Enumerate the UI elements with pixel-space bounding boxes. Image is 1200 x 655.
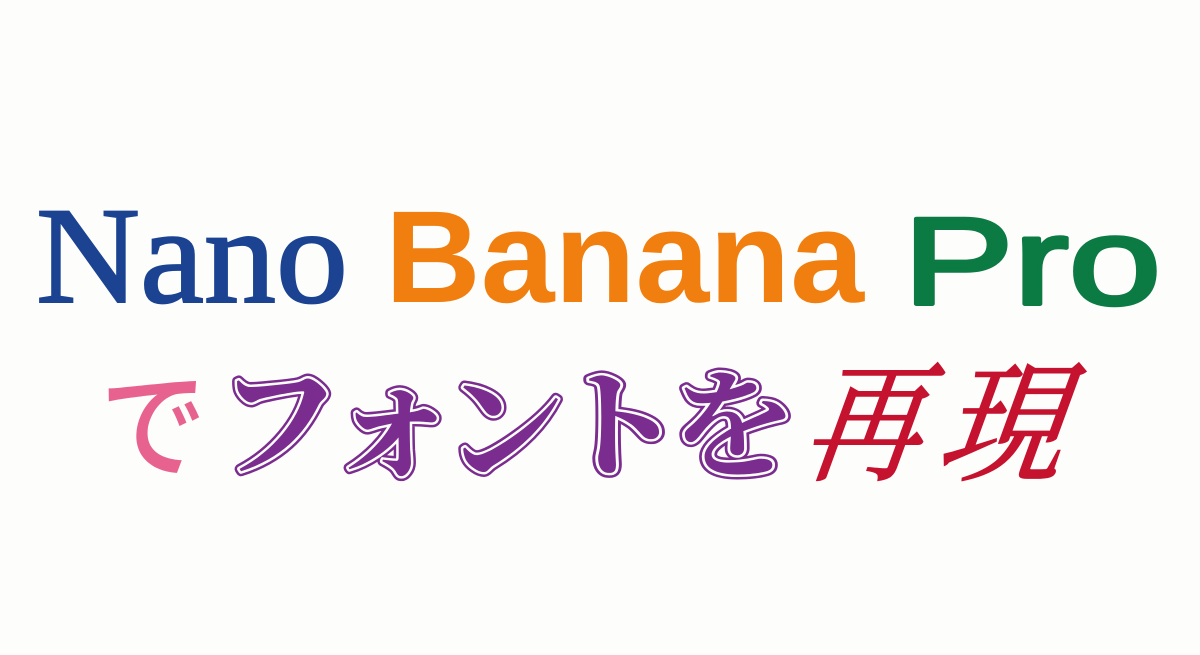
- glyph: ト: ト: [550, 365, 686, 493]
- glyphs: 再現 in red italic script: [790, 353, 1102, 499]
- glyph: 再: 再: [790, 354, 958, 499]
- glyph: ォ: ォ: [327, 350, 460, 498]
- glyph: 現: 現: [925, 353, 1102, 499]
- word: Banana in orange bold sans: Banana: [385, 183, 865, 330]
- glyph: を: を: [670, 364, 798, 493]
- glyph: ト: ト: [550, 365, 686, 493]
- glyph: フ: フ: [217, 357, 341, 494]
- glyph: フ: フ: [217, 357, 341, 494]
- glyph: を: を: [670, 364, 798, 493]
- title line 2: でフォントを再現: [93, 350, 1102, 499]
- glyph: フ: フ: [217, 357, 341, 494]
- title line 1: Nano Banana Pro: [36, 179, 1161, 332]
- glyph: ト: ト: [550, 365, 686, 493]
- word: Pro in green rounded sans: Pro: [903, 193, 1161, 331]
- glyph: ォ: ォ: [327, 350, 460, 498]
- glyph: ォ: ォ: [327, 350, 460, 498]
- glyph: ン: ン: [442, 362, 565, 499]
- ornamental katakana and hiragana: フォントを in purple: [217, 350, 798, 499]
- glyph: ン: ン: [442, 362, 565, 499]
- glyph: ン: ン: [442, 362, 565, 499]
- glyph: で in pink brush style: で: [93, 361, 210, 494]
- glyph: を: を: [670, 364, 798, 493]
- word: Nano in blue serif: Nano: [36, 179, 348, 332]
